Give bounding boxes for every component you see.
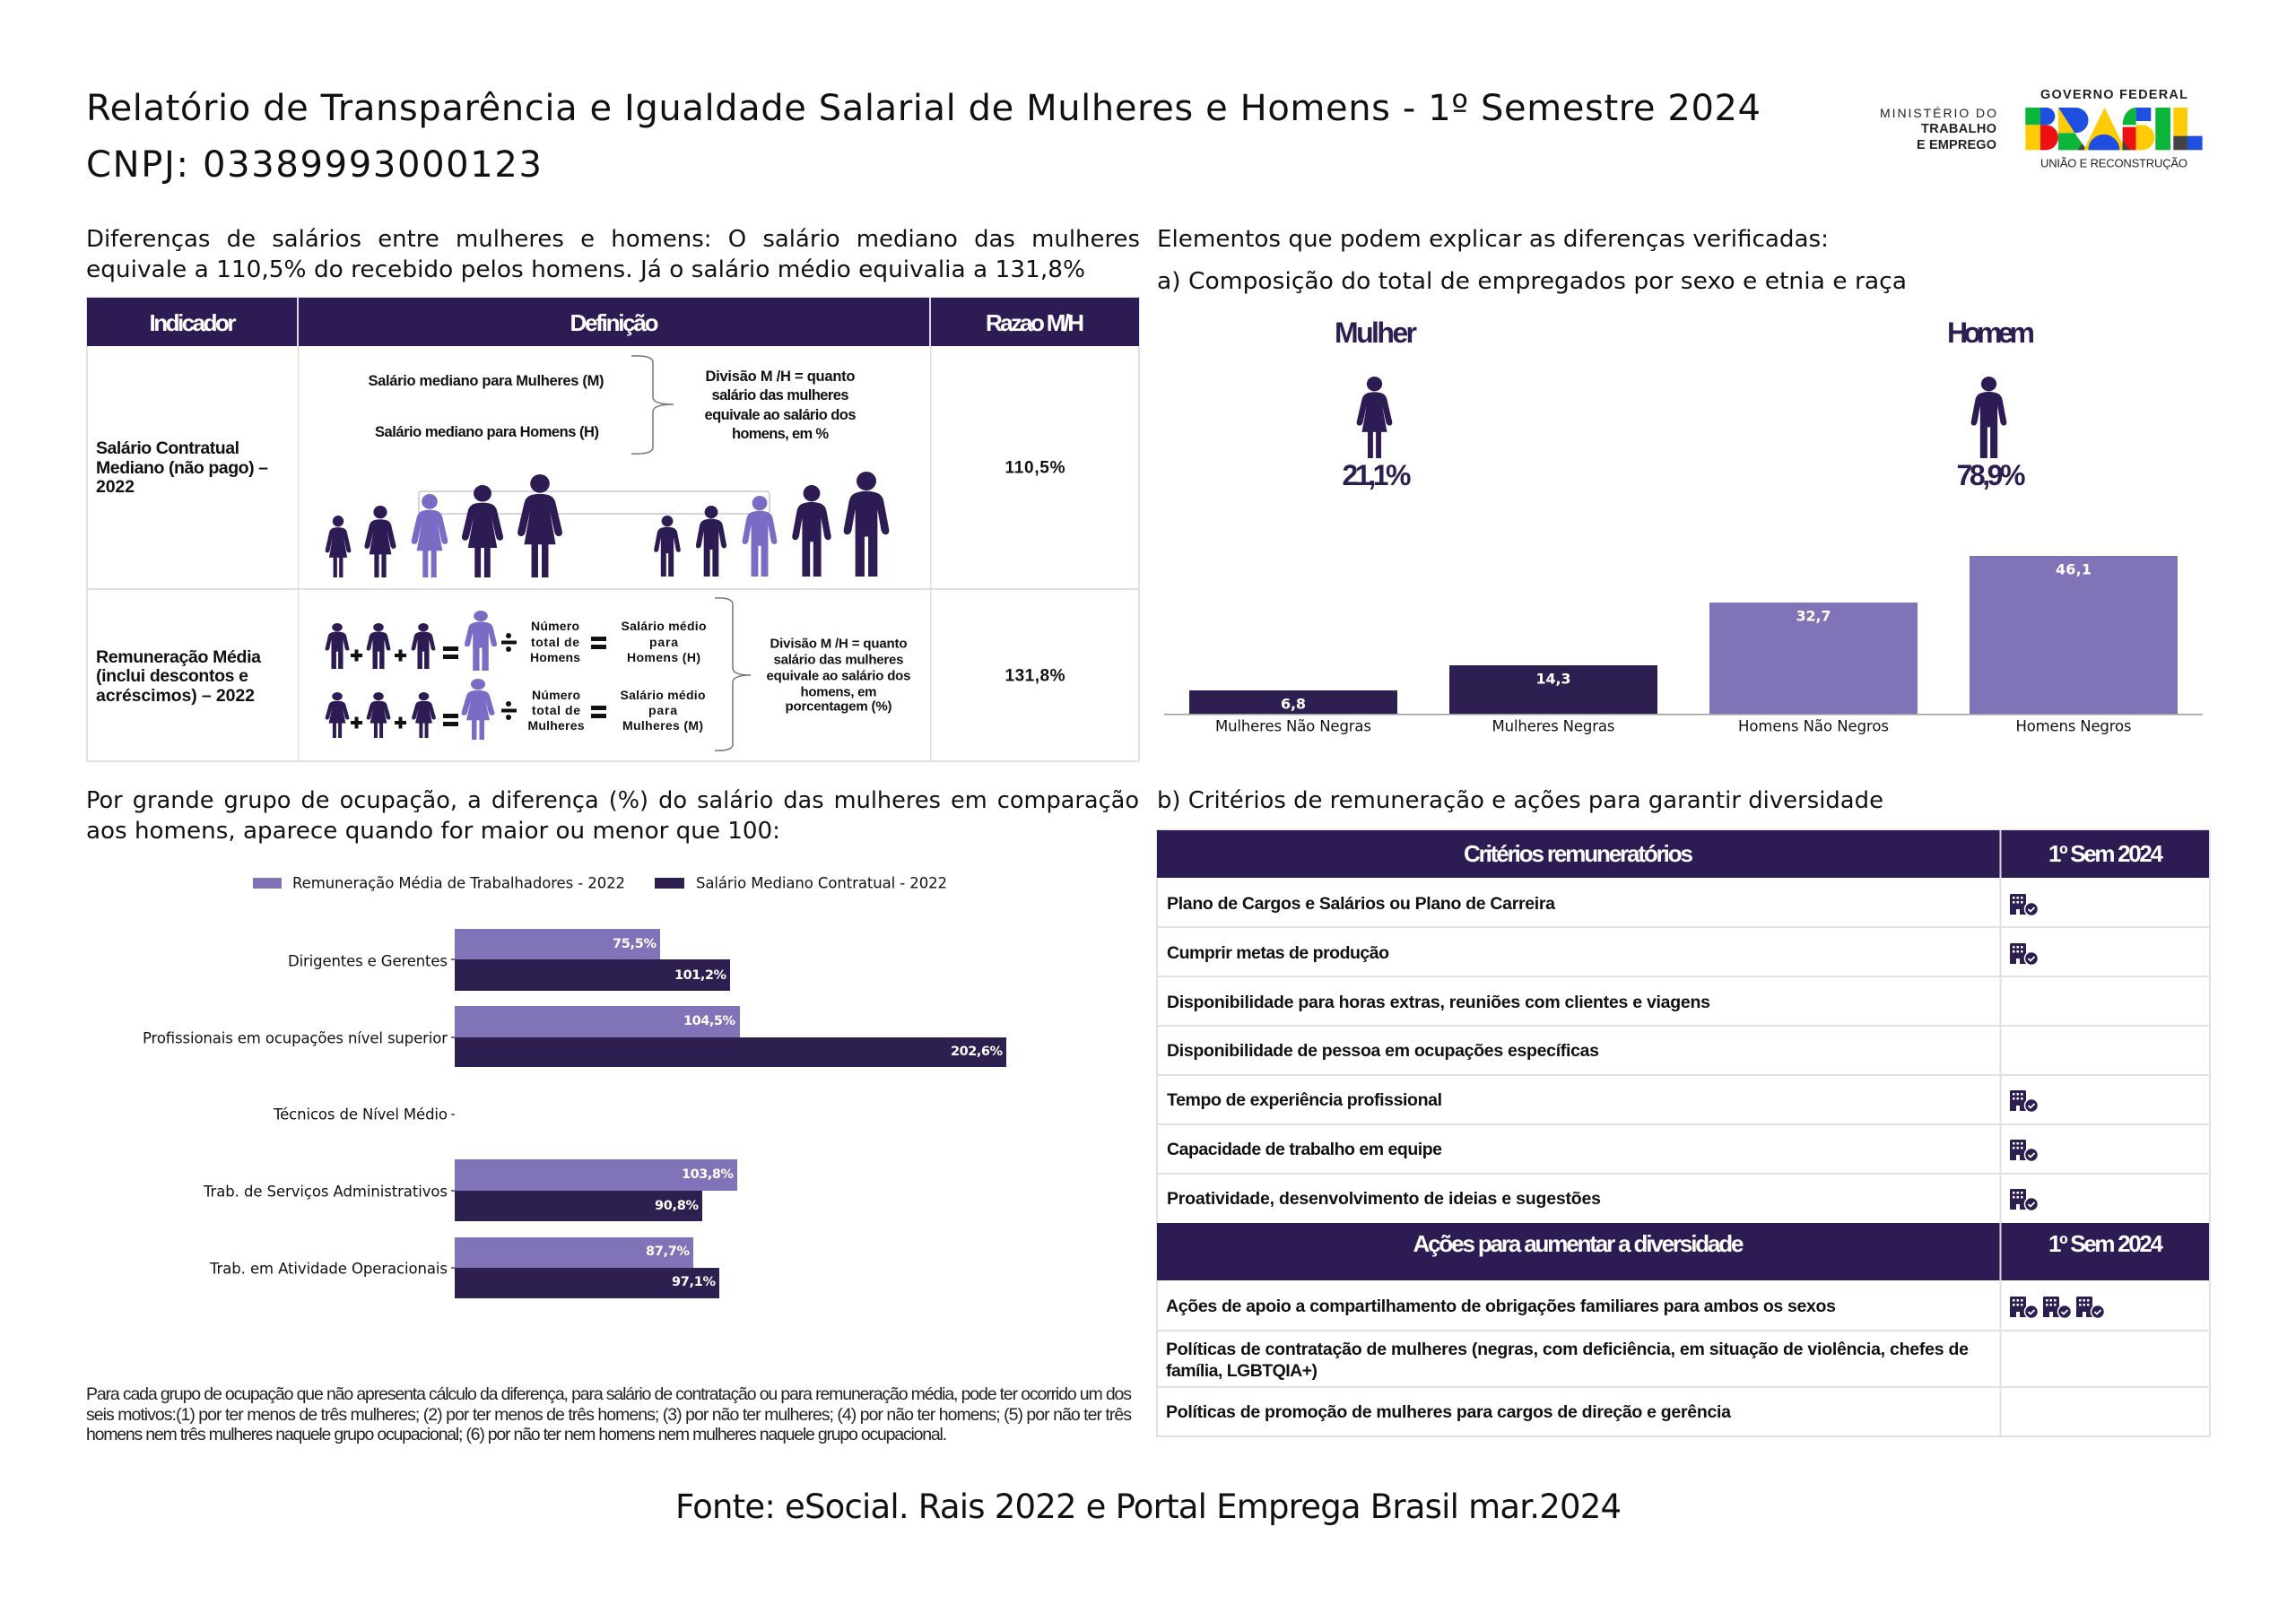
- criteria rows: Plano de Cargos e Salários ou Plano de Carreira: [1167, 894, 1555, 914]
- table header: [87, 298, 1139, 346]
- bar chart: composition by sex and race: Homens Negros: [2016, 717, 2131, 735]
- median definition text: Salário mediano para Homens (H): [375, 424, 599, 440]
- row: salário contratual label: Salário Contratual: [96, 438, 239, 458]
- intro text: salary differences: equivale a 110,5% do recebido pelos homens. Já o salário médio equivalia a 131,8%: [86, 256, 1085, 283]
- criteria header: [1157, 830, 2209, 878]
- criteria rows: Capacidade de trabalho em equipe: [1167, 1140, 1442, 1159]
- bar chart: salary ratio by occupation: 87,7%: [646, 1245, 690, 1259]
- bar chart: salary ratio by occupation: 75,5%: [613, 937, 657, 951]
- bar chart: salary ratio by occupation: 90,8%: [655, 1199, 699, 1213]
- bar chart: composition by sex and race: 6,8: [1281, 696, 1306, 712]
- actions rows: Políticas de contratação de mulheres (negras, com deficiência, em situação de violência, chefes de: [1166, 1340, 1969, 1359]
- bar chart: salary ratio by occupation: 202,6%: [951, 1045, 1003, 1059]
- row: remuneração média label: Remuneração Média: [96, 647, 261, 667]
- formula for women: [326, 679, 705, 740]
- formula for women: Mulheres: [527, 718, 585, 733]
- actions rows: [1166, 1297, 1969, 1422]
- actions rows: Políticas de promoção de mulheres para cargos de direção e gerência: [1166, 1402, 1731, 1422]
- heading: occupation groups: [86, 787, 1139, 845]
- formula for women: Salário médio: [621, 688, 705, 702]
- heading: criteria: b) Critérios de remuneração e ações para garantir diversidade: [1157, 787, 1883, 814]
- heading: explanatory elements: [1157, 226, 1907, 295]
- table header: Definição: [570, 309, 658, 336]
- panel: indicator table: [87, 298, 1139, 761]
- bar chart: composition by sex and race: [1164, 556, 2203, 735]
- footnote: homens nem três mulheres naquele grupo ocupacional; (6) por não ter nem homens nem mulheres naquele grupo ocupacional.: [86, 1425, 947, 1444]
- row: remuneração média label: acréscimos) – 2022: [96, 686, 255, 706]
- ratio value: 110,5%: [1004, 459, 1065, 477]
- panel: gender percentages: [1335, 317, 2035, 491]
- formula for men: Salário médio: [621, 619, 707, 633]
- heading: homem: Homem: [1947, 317, 2035, 349]
- heading: mulher: Mulher: [1335, 317, 1417, 349]
- chart legend: Remuneração Média de Trabalhadores - 2022: [292, 875, 625, 891]
- bar chart: salary ratio by occupation: 103,8%: [682, 1167, 734, 1182]
- footnote: seis motivos:(1) por ter menos de três mulheres; (2) por ter menos de três homens; (3) por não ter mulheres; (4) por não ter homens; (5) por não ter três: [86, 1405, 1132, 1425]
- bar chart: composition by sex and race: Mulheres Negras: [1492, 717, 1614, 735]
- median definition text: equivale ao salário dos: [705, 407, 856, 423]
- criteria rows: [1167, 894, 1710, 1209]
- median definition text: Salário mediano para Mulheres (M): [368, 373, 604, 389]
- chart legend: [253, 875, 947, 891]
- row: salário contratual label: [96, 438, 268, 497]
- ratio value: 131,8%: [1004, 667, 1065, 685]
- title: [86, 88, 1761, 186]
- bar chart: salary ratio by occupation: Técnicos de Nível Médio: [273, 1106, 448, 1123]
- actions rows: família, LGBTQIA+): [1166, 1361, 1318, 1381]
- average definition bracket and text: equivale ao salário dos: [766, 669, 911, 683]
- table header: Indicador: [149, 309, 237, 336]
- icons: criteria applied: [2010, 894, 2038, 1210]
- value: men share: 78,9%: [1957, 459, 2025, 491]
- logos: ministry and federal government: MINISTÉRIO DO: [1880, 106, 1996, 120]
- row: salário contratual label: 2022: [96, 477, 135, 497]
- bar chart: composition by sex and race: 46,1: [2056, 561, 2092, 577]
- formula for men: Homens: [530, 650, 580, 664]
- icon: man: [1971, 377, 2006, 458]
- criteria header: 1º Sem 2024: [2048, 840, 2164, 867]
- formula for men: [326, 611, 707, 671]
- logos: ministry and federal government: GOVERNO FEDERAL: [2040, 88, 2187, 102]
- heading: explanatory elements: a) Composição do total de empregados por sexo e etnia e raça: [1157, 268, 1907, 295]
- criteria header: Critérios remuneratórios: [1464, 840, 1693, 867]
- row: remuneração média label: [96, 647, 261, 706]
- criteria rows: Cumprir metas de produção: [1167, 943, 1389, 963]
- title: CNPJ: 03389993000123: [86, 144, 542, 186]
- logos: ministry and federal government: E EMPREGO: [1917, 138, 1996, 152]
- bar chart: salary ratio by occupation: Profissionais em ocupações nível superior: [143, 1029, 448, 1047]
- average definition bracket and text: [715, 598, 911, 750]
- title: Relatório de Transparência e Igualdade Salarial de Mulheres e Homens - 1º Semestre 2024: [86, 88, 1761, 129]
- criteria rows: Proatividade, desenvolvimento de ideias e sugestões: [1167, 1189, 1601, 1209]
- intro text: salary differences: [86, 226, 1140, 283]
- chart legend: Salário Mediano Contratual - 2022: [696, 875, 947, 891]
- bar chart: salary ratio by occupation: Trab. de Serviços Administrativos: [203, 1184, 448, 1200]
- icon: woman: [1357, 377, 1392, 458]
- logos: ministry and federal government: UNIÃO E RECONSTRUÇÃO: [2040, 156, 2187, 170]
- median definition text: Divisão M /H = quanto: [705, 369, 856, 385]
- row: salário contratual label: Mediano (não pago) –: [96, 458, 268, 478]
- heading: occupation groups: aos homens, aparece quando for maior ou menor que 100:: [86, 818, 780, 845]
- average definition bracket and text: porcentagem (%): [786, 699, 891, 714]
- criteria rows: Tempo de experiência profissional: [1167, 1090, 1442, 1110]
- footnote: Para cada grupo de ocupação que não apresenta cálculo da diferença, para salário de contratação ou para remuneração média, pode ter ocorrido um dos: [86, 1384, 1132, 1404]
- bar chart: salary ratio by occupation: Dirigentes e Gerentes: [288, 952, 448, 970]
- formula for women: Número: [532, 688, 580, 702]
- formula for men: para: [649, 635, 678, 649]
- actions header: Ações para aumentar a diversidade: [1413, 1230, 1744, 1257]
- median definition text: salário das mulheres: [712, 387, 848, 403]
- bar chart: salary ratio by occupation: Trab. em Atividade Operacionais: [209, 1261, 448, 1277]
- criteria rows: Disponibilidade de pessoa em ocupações específicas: [1167, 1041, 1599, 1061]
- bar chart: salary ratio by occupation: 101,2%: [674, 968, 726, 983]
- average definition bracket and text: homens, em: [800, 685, 877, 699]
- row: remuneração média label: (inclui descontos e: [96, 666, 248, 686]
- bar chart: salary ratio by occupation: 104,5%: [683, 1014, 735, 1028]
- heading: occupation groups: Por grande grupo de ocupação, a diferença (%) do salário das mulheres em comparação: [86, 787, 1139, 814]
- source line: Fonte: eSocial. Rais 2022 e Portal Emprega Brasil mar.2024: [675, 1488, 1622, 1526]
- bar chart: salary ratio by occupation: 97,1%: [672, 1275, 716, 1289]
- logos: ministry and federal government: [1880, 88, 2203, 170]
- logos: ministry and federal government: TRABALHO: [1921, 122, 1996, 136]
- bar chart: composition by sex and race: 14,3: [1535, 671, 1571, 687]
- intro text: salary differences: Diferenças de salários entre mulheres e homens: O salário mediano das mulheres: [86, 226, 1140, 253]
- formula for women: total de: [532, 703, 580, 717]
- formula for women: Mulheres (M): [622, 718, 703, 733]
- actions header: [1157, 1223, 2209, 1280]
- formula for men: Homens (H): [627, 650, 700, 664]
- criteria rows: Disponibilidade para horas extras, reuniões com clientes e viagens: [1167, 993, 1710, 1012]
- footnote: [86, 1384, 1132, 1444]
- median figures row: [326, 472, 889, 577]
- median definition text: homens, em %: [732, 426, 829, 442]
- bar chart: salary ratio by occupation: [143, 929, 1006, 1298]
- formula for women: para: [648, 703, 677, 717]
- value: women share: 21,1%: [1342, 459, 1412, 491]
- bar chart: composition by sex and race: Mulheres Não Negras: [1215, 717, 1371, 735]
- actions header: 1º Sem 2024: [2048, 1230, 2164, 1257]
- formula for men: Número: [531, 619, 579, 633]
- actions rows: Ações de apoio a compartilhamento de obrigações familiares para ambos os sexos: [1166, 1297, 1836, 1316]
- icons: actions applied: [2010, 1297, 2104, 1318]
- median definition text: [368, 356, 856, 454]
- panel: remuneration criteria table: [1157, 830, 2210, 1436]
- average definition bracket and text: Divisão M /H = quanto: [770, 637, 908, 651]
- bar chart: composition by sex and race: 32,7: [1796, 608, 1831, 624]
- heading: explanatory elements: Elementos que podem explicar as diferenças verificadas:: [1157, 226, 1829, 253]
- table header: Razao M/H: [986, 309, 1084, 336]
- formula for men: total de: [531, 635, 579, 649]
- bar chart: composition by sex and race: Homens Não Negros: [1738, 717, 1889, 735]
- average definition bracket and text: salário das mulheres: [773, 653, 904, 667]
